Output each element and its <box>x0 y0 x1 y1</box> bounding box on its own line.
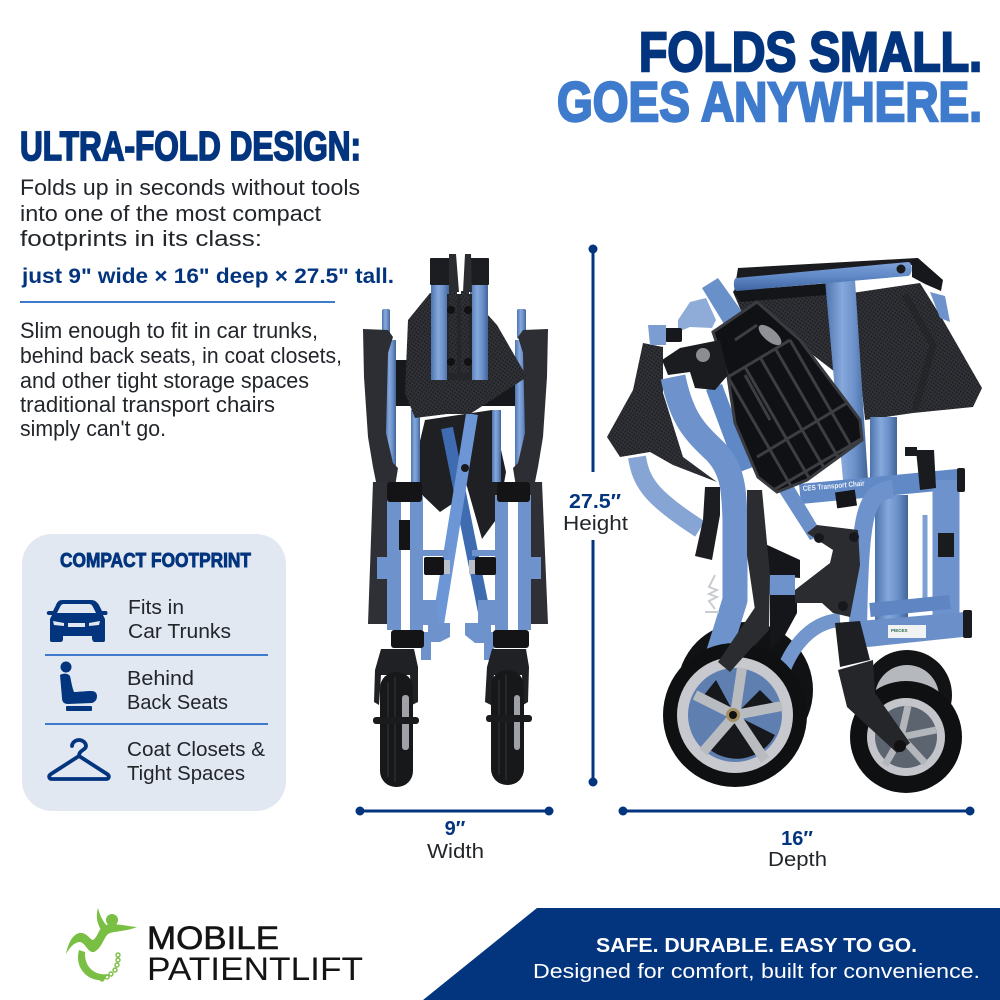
top corner cap <box>896 258 950 322</box>
serial label: PIECES <box>891 628 908 633</box>
logo wordmark: PATIENTLIFT <box>147 951 363 987</box>
description text block: Slim enough to fit in car trunks, <box>20 318 318 343</box>
left frame <box>377 495 450 660</box>
blue lower strip behind pad <box>768 575 795 595</box>
intro text block: footprints in its class: <box>20 226 262 251</box>
description text block: and other tight storage spaces <box>20 368 309 393</box>
text: fits in car trunks: Car Trunks <box>128 621 231 643</box>
rear wheel behind <box>677 622 813 758</box>
push handle grips <box>430 254 489 292</box>
brake lever <box>695 487 720 560</box>
top frame bar <box>734 262 912 291</box>
main side frame <box>673 377 745 655</box>
intro text block: into one of the most compact <box>20 201 321 226</box>
icon: coat hanger <box>49 740 109 779</box>
intro text block <box>20 175 360 251</box>
footplate <box>711 300 864 494</box>
text: fits in car trunks <box>128 597 231 643</box>
right mesh bag <box>852 283 982 420</box>
armrest tip over wheel <box>718 600 769 672</box>
black mid parts <box>763 490 857 650</box>
spring mechanism <box>705 575 719 612</box>
dimension: height <box>563 244 628 786</box>
left mesh bag <box>607 343 717 482</box>
left caster <box>373 649 419 787</box>
caster stem <box>835 621 870 667</box>
description text block: traditional transport chairs <box>20 392 275 417</box>
hinge plate <box>795 525 860 617</box>
armrests <box>363 329 548 493</box>
text: behind back seats <box>127 668 228 714</box>
illustration: folded chair side view <box>607 258 982 793</box>
rear front wheel behind <box>862 650 952 740</box>
banner tagline: Designed for comfort, built for convenience. <box>533 961 980 983</box>
logo mark <box>66 908 137 981</box>
dimension: width <box>356 806 554 863</box>
serial label <box>888 625 926 638</box>
description text block: behind back seats, in coat closets, <box>20 343 342 368</box>
description text block <box>20 318 342 441</box>
footer banner <box>423 908 1000 1000</box>
right frame <box>465 495 541 660</box>
push handle tubes <box>431 284 488 380</box>
upper side tubes <box>382 309 526 482</box>
dimension: depth: Depth <box>768 849 827 871</box>
intro text block: Folds up in seconds without tools <box>20 175 360 200</box>
diagonal strut <box>778 485 823 540</box>
upper bracket <box>678 298 716 332</box>
panel: compact footprint <box>22 534 286 811</box>
armrest side pad front <box>718 490 770 672</box>
left handle tube <box>637 457 700 529</box>
logo: mobile patientlift <box>66 908 363 987</box>
curved under tube <box>778 620 840 690</box>
logo wordmark: MOBILE <box>147 920 279 956</box>
dimension: width: Width <box>427 841 484 863</box>
dimension: depth: 16″ <box>781 828 813 850</box>
description text block: simply can't go. <box>20 416 166 441</box>
text: coat closets: Tight Spaces <box>127 763 245 785</box>
icon: car seat <box>60 662 97 711</box>
footplate hinge clamp <box>648 325 728 390</box>
small front wheel <box>850 681 962 793</box>
lower seat fabric <box>413 410 506 539</box>
text: behind back seats: Back Seats <box>127 692 228 714</box>
icon: car <box>47 600 108 642</box>
logo wordmark <box>147 920 363 987</box>
section heading: ultra-fold design: ULTRA-FOLD DESIGN: <box>20 123 361 169</box>
banner slogan: SAFE. DURABLE. EASY TO GO. <box>596 935 917 957</box>
text: coat closets: Coat Closets & <box>127 739 266 761</box>
frame name text: CES Transport Chair <box>802 479 865 493</box>
text: coat closets <box>127 739 266 785</box>
side clips <box>905 447 972 638</box>
text: fits in car trunks: Fits in <box>128 597 184 619</box>
headline <box>557 20 982 133</box>
seat fabric <box>733 284 835 372</box>
clamps <box>387 482 530 648</box>
footplate support strut <box>702 278 748 337</box>
seat back bar shadow <box>734 258 918 292</box>
caster fork <box>838 660 910 753</box>
right caster <box>485 649 532 785</box>
dimension: depth <box>618 806 974 871</box>
folded mesh bag <box>405 293 527 418</box>
large wheel <box>663 643 807 787</box>
arch frame <box>800 479 958 630</box>
text: behind back seats: Behind <box>127 668 194 690</box>
dimensions highlight: just 9" wide × 16" deep × 27.5" tall. <box>21 265 394 288</box>
base block <box>836 612 965 647</box>
crossed center tubes <box>438 414 486 624</box>
panel heading: COMPACT FOOTPRINT <box>60 550 251 572</box>
dimension: width: 9″ <box>445 818 466 840</box>
illustration: folded chair front view <box>363 254 548 787</box>
dimension: height: 27.5″ <box>569 491 621 513</box>
side panels <box>368 482 548 624</box>
dimension: height: Height <box>563 513 628 535</box>
vertical frame tubes <box>825 280 908 620</box>
